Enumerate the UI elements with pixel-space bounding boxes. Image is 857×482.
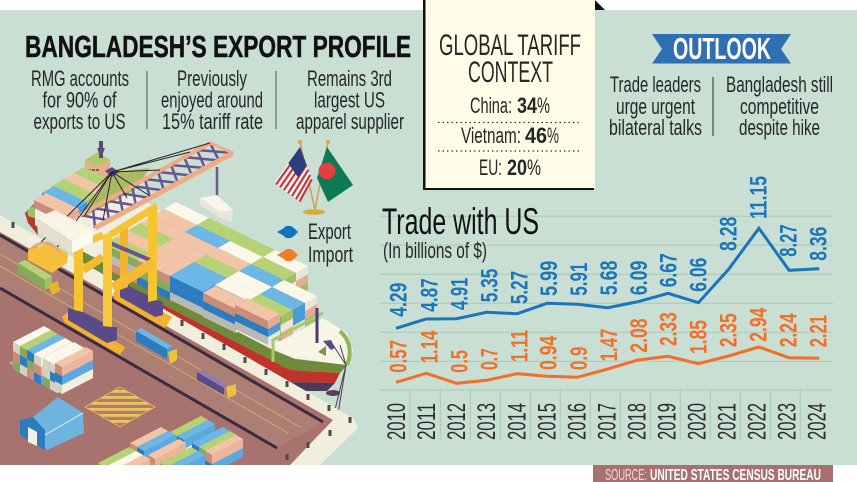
export values: 5.99 bbox=[536, 261, 563, 296]
outlook: trade leaders bbox=[609, 72, 702, 140]
illustration: port with ship and crane bbox=[0, 141, 358, 482]
export values: 5.68 bbox=[596, 261, 623, 295]
export values bbox=[386, 176, 833, 317]
icon: Bangladesh flag bbox=[317, 147, 353, 202]
rate: EU: 20 bbox=[507, 155, 527, 180]
export values: 5.91 bbox=[566, 263, 593, 296]
icon: US flag bbox=[274, 147, 312, 202]
icon: bridge tower bbox=[85, 141, 110, 190]
chart: trade with US bbox=[380, 176, 833, 440]
export values: 11.15 bbox=[746, 176, 773, 219]
crane boom bbox=[33, 143, 233, 250]
export values: 5.27 bbox=[506, 271, 533, 304]
year axis labels: 2013 bbox=[473, 403, 501, 440]
outlook: trade leaders: bilateral talks bbox=[609, 115, 702, 140]
export values: 8.28 bbox=[716, 217, 743, 251]
year axis labels: 2015 bbox=[534, 403, 562, 440]
fact: previous tariff: Previously bbox=[177, 66, 247, 91]
year axis labels: 2016 bbox=[564, 403, 592, 440]
rate: China: China: bbox=[470, 93, 512, 118]
rate: Vietnam: 46 bbox=[525, 123, 547, 148]
import values: 2.94 bbox=[746, 307, 773, 342]
import values: 0.5 bbox=[446, 350, 473, 373]
export values: 4.91 bbox=[446, 278, 473, 310]
outlook banner bbox=[652, 31, 791, 66]
fact: previous tariff: enjoyed around bbox=[161, 88, 263, 112]
warehouse bbox=[20, 397, 84, 450]
year axis labels: 2023 bbox=[774, 403, 802, 440]
import line bbox=[396, 347, 819, 383]
import values: 1.85 bbox=[686, 320, 713, 354]
outlook text bbox=[609, 72, 833, 140]
heading: global tariff bbox=[439, 29, 581, 89]
outlook: trade leaders: urge urgent bbox=[616, 94, 695, 119]
stern containers bbox=[34, 167, 117, 224]
export values: 4.87 bbox=[416, 278, 443, 312]
year axis labels: 2020 bbox=[684, 403, 712, 440]
rate: EU bbox=[479, 155, 541, 180]
import values: 2.35 bbox=[716, 313, 743, 347]
year axis labels: 2011 bbox=[413, 403, 441, 440]
rate: Vietnam: Vietnam: bbox=[461, 123, 521, 148]
outlook: still competitive: competitive bbox=[740, 94, 819, 119]
heading: global tariff: CONTEXT bbox=[468, 56, 553, 89]
year axis labels: 2017 bbox=[594, 403, 622, 440]
export line bbox=[396, 228, 819, 328]
ship bbox=[25, 141, 353, 432]
panel: global tariff context bbox=[423, 0, 605, 190]
outlook banner: OUTLOOK bbox=[673, 31, 771, 66]
feet bbox=[62, 285, 172, 355]
fact: previous tariff: 15% tariff rate bbox=[162, 109, 263, 134]
import values: 1.47 bbox=[596, 329, 623, 361]
fact: RMG share: for 90% of bbox=[42, 88, 117, 112]
fact: RMG share: RMG accounts bbox=[31, 66, 129, 91]
source bar bbox=[593, 465, 833, 482]
year axis labels: 2024 bbox=[804, 403, 832, 440]
year axis labels: 2012 bbox=[443, 403, 471, 440]
machinery housing bbox=[37, 210, 93, 253]
heading: global tariff: GLOBAL TARIFF bbox=[439, 29, 581, 62]
truck: purple bbox=[197, 370, 236, 398]
import values: 0.57 bbox=[386, 340, 413, 373]
spreader bbox=[28, 243, 68, 273]
fact: apparel supplier: apparel supplier bbox=[296, 109, 404, 134]
import values: 1.14 bbox=[416, 330, 443, 363]
export values: 6.09 bbox=[626, 261, 653, 295]
legend bbox=[277, 219, 353, 267]
import values: 1.11 bbox=[506, 330, 533, 362]
year axis labels: 2014 bbox=[504, 403, 532, 440]
year axis labels: 2021 bbox=[714, 403, 742, 440]
export values: 5.35 bbox=[476, 269, 503, 302]
outlook: still competitive: despite hike bbox=[739, 115, 820, 140]
panel: export facts bbox=[31, 66, 404, 134]
export values: 6.67 bbox=[656, 253, 683, 287]
export values: 6.06 bbox=[686, 258, 713, 292]
ground containers bbox=[10, 326, 93, 394]
rate: Vietnam: % bbox=[547, 123, 559, 148]
import values: 0.94 bbox=[536, 335, 563, 370]
rate: China: % bbox=[537, 93, 550, 118]
icon: US and Bangladesh flags bbox=[274, 140, 353, 215]
hanging load bbox=[200, 167, 233, 222]
hatched zone bbox=[85, 387, 155, 427]
fact: apparel supplier bbox=[296, 66, 404, 134]
legend: export: Export bbox=[308, 219, 351, 244]
fact: apparel supplier: largest US bbox=[314, 88, 385, 112]
export values: 4.29 bbox=[386, 283, 413, 317]
import values: 2.33 bbox=[656, 312, 683, 346]
rate: EU: EU: bbox=[479, 155, 502, 180]
fact: RMG share: exports to US bbox=[34, 109, 126, 134]
year axis labels bbox=[383, 403, 832, 440]
chart subtitle: (In billions of $) bbox=[383, 238, 487, 263]
gantry crane bbox=[28, 143, 233, 355]
legend: import: Import bbox=[308, 242, 353, 267]
title: BANGLADESH’S EXPORT PROFILE bbox=[25, 29, 411, 64]
import values: 2.24 bbox=[776, 313, 803, 347]
rate: EU: % bbox=[527, 155, 541, 180]
fact: apparel supplier: Remains 3rd bbox=[307, 66, 392, 91]
rate: China: 34 bbox=[517, 93, 538, 118]
year axis labels: 2018 bbox=[624, 403, 652, 440]
export values: 8.27 bbox=[776, 224, 803, 257]
import values: 0.7 bbox=[476, 348, 503, 370]
quay bbox=[0, 215, 358, 465]
truck: blue bbox=[136, 328, 177, 364]
container stacks on deck bbox=[104, 202, 317, 345]
bottom containers bbox=[98, 416, 243, 482]
export values: 8.36 bbox=[806, 227, 833, 261]
outlook: still competitive bbox=[726, 72, 833, 140]
year axis labels: 2010 bbox=[383, 403, 411, 440]
bow deck bbox=[273, 308, 353, 432]
import values: 0.9 bbox=[566, 347, 593, 370]
year axis labels: 2022 bbox=[744, 403, 772, 440]
fact: previous tariff bbox=[161, 66, 263, 134]
import values: 2.08 bbox=[626, 318, 653, 353]
import values bbox=[386, 307, 833, 373]
outlook: trade leaders: Trade leaders bbox=[610, 72, 701, 97]
truck: green bbox=[18, 260, 60, 295]
fact: RMG share bbox=[31, 66, 129, 134]
year axis labels: 2019 bbox=[654, 403, 682, 440]
import values: 2.21 bbox=[806, 315, 833, 347]
chart title: Trade with US bbox=[382, 201, 539, 242]
